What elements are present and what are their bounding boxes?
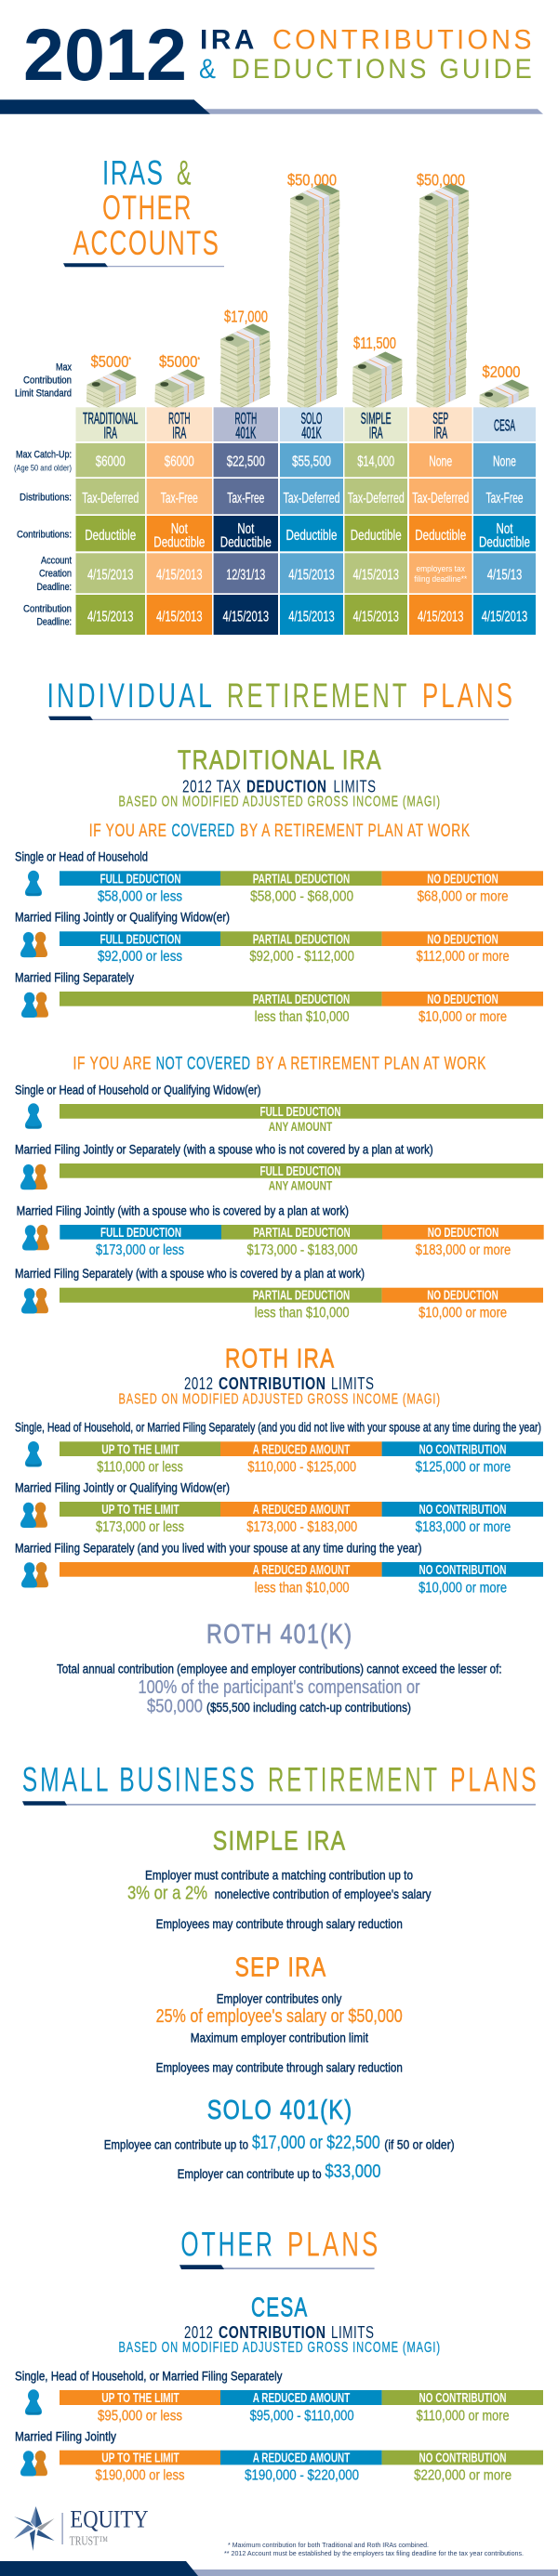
contribution bar: UP TO THE LIMIT: [101, 2451, 179, 2466]
contribution bar: [60, 2451, 543, 2466]
row: separately, lived with spouse: Married Filing Separately (and you lived with your spouse at any time during the year): [15, 1541, 422, 1556]
amounts: [255, 1306, 507, 1321]
amount: ANY AMOUNT: [269, 1178, 333, 1193]
amounts: $92,000 or less: [98, 949, 182, 965]
column: roth IRA: 4/15/2013: [156, 609, 203, 624]
amounts: $220,000 or more: [414, 2468, 512, 2484]
section title: TRADITIONAL IRA: [178, 746, 382, 776]
deduction bar: PARTIAL DEDUCTION: [253, 932, 350, 947]
stack: solo 401k: $50,000: [287, 170, 337, 189]
row: single or separately: [15, 2369, 543, 2424]
column: roth 401k: 401K: [235, 424, 256, 442]
column: SEP IRA: None: [429, 454, 452, 470]
amounts: less than $10,000: [255, 1306, 350, 1321]
row: spouse not covered: Married Filing Jointly or Separately (with a spouse who is not covered by a plan at work): [15, 1141, 433, 1156]
subtitle: LIMITS: [333, 777, 376, 796]
row: jointly or widow: Married Filing Jointly or Qualifying Widow(er): [15, 1480, 230, 1495]
amounts: $183,000 or more: [416, 1519, 511, 1535]
contribution bar: NO CONTRIBUTION: [418, 1503, 506, 1518]
column: traditional IRA: [76, 407, 145, 635]
column: roth 401k: $22,500: [227, 454, 265, 470]
stack: roth IRA: $5000: [159, 352, 205, 371]
column: simple IRA: 4/15/2013: [352, 568, 399, 584]
amounts: [255, 1580, 507, 1596]
amounts: [98, 888, 509, 904]
contribution bar: [60, 1502, 543, 1518]
employee limit: (if 50 or older): [384, 2136, 455, 2151]
subtitle: LIMITS: [331, 1373, 374, 1393]
contribution bar: A REDUCED AMOUNT: [253, 1563, 350, 1578]
stack: roth 401k: [220, 308, 271, 409]
highlight: 50,000 limit: [147, 1697, 411, 1717]
description: Employer contributes only: [217, 1991, 341, 2006]
column: roth 401k: Deductible: [220, 534, 272, 550]
column: CESA: 4/15/13: [487, 568, 522, 584]
column: solo 401k: 401K: [301, 424, 322, 442]
contribution bar: UP TO THE LIMIT: [101, 1442, 179, 1457]
column: solo 401k: 4/15/2013: [288, 568, 335, 584]
amounts: [95, 2468, 512, 2484]
deduction bar: PARTIAL DEDUCTION: [253, 1289, 350, 1304]
column: roth 401k: 4/15/2013: [223, 609, 269, 624]
deduction bar: [60, 871, 543, 887]
footnotes: ** 2012 Account must be established by the employers tax filing deadline for the tax year contributions.: [224, 2549, 524, 2557]
section title: SOLO 401(K): [207, 2096, 353, 2125]
amounts: [98, 2408, 510, 2424]
column: simple IRA: SIMPLE: [361, 409, 392, 427]
amounts: $112,000 or more: [417, 949, 510, 965]
contribution bar: [60, 2390, 543, 2406]
row labels: (Age 50 and older): [14, 464, 72, 473]
description: Employees may contribute through salary reduction: [156, 2059, 403, 2074]
employee limit: $17,000 or $22,500: [252, 2133, 380, 2153]
row: separately, spouse covered: [15, 1266, 543, 1321]
column: simple IRA: Deductible: [351, 528, 402, 544]
subtitle: CONTRIBUTION: [219, 2322, 326, 2342]
column: solo 401k: 4/15/2013: [288, 609, 335, 624]
row labels: Max Catch-Up:: [16, 450, 72, 461]
column: traditional IRA: 4/15/2013: [87, 609, 134, 624]
row labels: Deadline:: [37, 617, 72, 628]
deduction bar: PARTIAL DEDUCTION: [253, 872, 350, 887]
highlight: matching percent: [127, 1883, 432, 1903]
amounts: $190,000 or less: [95, 2468, 184, 2484]
amounts: $10,000 or more: [418, 1580, 507, 1596]
column: traditional IRA: Deductible: [85, 528, 136, 544]
column: CESA: 4/15/2013: [482, 609, 527, 624]
deduction bar: [60, 1104, 543, 1120]
row labels: Deadline:: [37, 582, 72, 593]
icon: couple: [20, 2451, 47, 2476]
amounts: $110,000 - $125,000: [247, 1459, 356, 1475]
employer limit: [178, 2162, 381, 2182]
subtitle: LIMITS: [331, 2322, 374, 2342]
deduction bar: NO DEDUCTION: [427, 932, 498, 947]
icon: couple: [20, 932, 47, 957]
subtitle: [182, 777, 376, 796]
column: SEP IRA: Tax-Deferred: [412, 491, 469, 506]
column: roth IRA: Not: [171, 521, 188, 537]
column: SEP IRA: filing deadline**: [414, 574, 467, 585]
row labels: Contribution: [23, 375, 72, 386]
heading: small business retirement plans: SMALL BUSINESS: [22, 1760, 258, 1798]
amounts: $95,000 - $110,000: [250, 2408, 354, 2424]
column: solo 401k: Tax-Deferred: [283, 491, 340, 506]
wordmark: equity: EQUITY: [70, 2505, 149, 2532]
section title: SIMPLE IRA: [213, 1827, 346, 1857]
subtitle: 2012: [184, 2322, 214, 2342]
employee limit: [104, 2133, 455, 2153]
highlight: compensation: 100% of the participant's compensation or: [138, 1677, 420, 1698]
contribution bar: NO CONTRIBUTION: [418, 2451, 506, 2466]
column: roth IRA: IRA: [172, 424, 186, 442]
deduction bar: FULL DEDUCTION: [260, 1105, 340, 1120]
column: roth 401k: [214, 407, 278, 635]
footnotes: [224, 2541, 524, 2557]
row: spouse not covered: [15, 1141, 543, 1193]
row: single or head of household: [15, 849, 543, 904]
column: roth 401k: Not: [237, 521, 255, 537]
column: roth 401k: Tax-Free: [227, 491, 264, 506]
amounts: [255, 1009, 507, 1025]
row labels: Contribution: [23, 603, 72, 614]
icon: couple: [21, 992, 48, 1018]
icon: person: [25, 1103, 42, 1129]
column: CESA: None: [493, 454, 516, 470]
title: deductions guide: DEDUCTIONS GUIDE: [232, 54, 535, 85]
row: single or qualifying widow: [15, 1082, 543, 1134]
section: traditional IRA: [15, 746, 544, 1321]
deduction bar: PARTIAL DEDUCTION: [253, 1226, 351, 1241]
column: traditional IRA: $6000: [96, 454, 126, 470]
column: simple IRA: Tax-Deferred: [348, 491, 405, 506]
section: roth IRA: [15, 1344, 543, 1596]
column: CESA: Not: [497, 521, 513, 537]
column: roth IRA: ROTH: [168, 409, 190, 427]
footer rule: [0, 2561, 558, 2576]
subheading: not covered: IF YOU ARE: [73, 1055, 152, 1074]
row labels: [14, 361, 72, 628]
row labels: Max: [56, 361, 72, 373]
deduction bar: NO DEDUCTION: [427, 992, 498, 1007]
column: SEP IRA: Deductible: [415, 528, 466, 544]
amounts: $95,000 or less: [98, 2408, 182, 2424]
stack: CESA: $2000: [482, 362, 521, 381]
row: separately, lived with spouse: [15, 1541, 543, 1596]
contribution bar: A REDUCED AMOUNT: [253, 2391, 350, 2406]
employee limit: Employee can contribute up to: [104, 2136, 248, 2151]
row: jointly or widow: [15, 1480, 543, 1535]
subheading: covered: BY A RETIREMENT PLAN AT WORK: [240, 821, 471, 841]
subtitle: 2012: [184, 1373, 214, 1393]
icon: person: [25, 2389, 42, 2415]
highlight: matching percent: 3% or a 2%: [127, 1883, 207, 1903]
header rule: [0, 99, 543, 114]
heading: individual retirement plans: RETIREMENT: [227, 677, 409, 715]
row: single or head of household: Single or Head of Household: [15, 849, 148, 864]
amounts: $58,000 or less: [98, 888, 182, 904]
deduction bar: NO DEDUCTION: [427, 872, 498, 887]
highlight: matching percent: nonelective contribution of employee's salary: [215, 1886, 432, 1901]
amounts: $92,000 - $112,000: [249, 949, 354, 965]
contribution bar: A REDUCED AMOUNT: [253, 1442, 350, 1457]
deduction bar: FULL DEDUCTION: [260, 1164, 340, 1179]
stack: SEP IRA: [417, 170, 469, 410]
amounts: [98, 949, 510, 965]
row: married filing separately: Married Filing Separately: [15, 970, 134, 985]
stack: solo 401k: [287, 170, 339, 410]
column: solo 401k: [280, 407, 343, 635]
deduction bar: [60, 931, 543, 947]
logo: Equity Trust: [14, 2505, 149, 2551]
description: Maximum employer contribution limit: [191, 2030, 368, 2044]
column: SEP IRA: [409, 407, 472, 635]
stack: roth IRA: [154, 352, 205, 409]
row: married filing jointly: Married Filing Jointly: [15, 2428, 116, 2443]
section title: ROTH 401(K): [206, 1620, 353, 1649]
table: account comparison: [14, 361, 536, 635]
subtitle: 2012 TAX: [182, 777, 242, 796]
deduction bar: NO DEDUCTION: [428, 1226, 498, 1241]
title: ampersand: &: [199, 54, 216, 85]
icon: person: [25, 1441, 42, 1466]
contribution bar: [60, 1441, 543, 1457]
row: separately, spouse covered: Married Filing Separately (with a spouse who is covered by a plan at work): [15, 1266, 365, 1281]
subtitle: CONTRIBUTION: [219, 1373, 326, 1393]
amounts: [97, 1459, 511, 1475]
employer limit: $33,000: [325, 2162, 381, 2182]
footnotes: * Maximum contribution for both Traditional and Roth IRAs combined.: [228, 2541, 429, 2549]
heading: IRAs and other accounts: &: [177, 152, 192, 191]
row: single or separately: Single, Head of Household, or Married Filing Separately: [15, 2369, 283, 2384]
highlight: 25 percent: 25% of employee's salary or $50,000: [156, 2006, 403, 2027]
heading: individual retirement plans: [46, 677, 515, 720]
column: roth IRA: Deductible: [153, 534, 205, 550]
row: married filing jointly: [15, 2428, 543, 2484]
column: roth IRA: 4/15/2013: [156, 568, 203, 584]
section: solo 401k: [104, 2096, 455, 2182]
amounts: $68,000 or more: [418, 888, 509, 904]
column: simple IRA: [344, 407, 407, 635]
column: roth 401k: 12/31/13: [226, 568, 265, 584]
stack: roth 401k: $17,000: [224, 308, 268, 326]
deduction bar: NO DEDUCTION: [427, 1289, 498, 1304]
heading: other plans: [179, 2226, 380, 2269]
row: married filing jointly: [15, 910, 543, 965]
deduction bar: FULL DEDUCTION: [100, 1226, 181, 1241]
amounts: $173,000 - $183,000: [247, 1242, 358, 1258]
contribution bar: A REDUCED AMOUNT: [253, 2451, 350, 2466]
row: married filing separately: [15, 970, 543, 1025]
column: SEP IRA: employers tax: [416, 564, 465, 574]
description: Employer must contribute a matching contribution up to: [145, 1868, 413, 1883]
column: simple IRA: $14,000: [357, 454, 394, 470]
contribution bar: [60, 1562, 543, 1578]
column: roth 401k: ROTH: [234, 409, 257, 427]
row labels: Contributions:: [17, 530, 72, 541]
amounts: less than $10,000: [255, 1009, 350, 1025]
subheading: covered: COVERED: [171, 821, 235, 841]
deduction bar: [60, 1225, 544, 1241]
column: roth IRA: $6000: [165, 454, 194, 470]
amounts: [96, 1242, 511, 1258]
contribution bar: NO CONTRIBUTION: [418, 2391, 506, 2406]
contribution bar: UP TO THE LIMIT: [101, 2391, 179, 2406]
amounts: $110,000 or less: [97, 1459, 183, 1475]
subheading: covered: IF YOU ARE: [89, 821, 167, 841]
row: married filing jointly: Married Filing Jointly or Qualifying Widow(er): [15, 910, 230, 925]
icon: star: [14, 2506, 54, 2551]
stack: traditional IRA: $5000: [91, 352, 136, 371]
amounts: $110,000 or more: [417, 2408, 510, 2424]
column: solo 401k: $55,500: [292, 454, 331, 470]
contribution bar: NO CONTRIBUTION: [418, 1442, 506, 1457]
column: CESA: [473, 407, 536, 635]
heading: small business retirement plans: RETIREMENT: [268, 1760, 440, 1798]
heading: other plans: PLANS: [287, 2226, 380, 2264]
amounts: $125,000 or more: [416, 1459, 511, 1475]
chart: money stacks: [86, 170, 529, 412]
stack: roth IRA: *: [197, 356, 200, 364]
contribution bar: A REDUCED AMOUNT: [253, 1503, 350, 1518]
row labels: Distributions:: [20, 493, 72, 504]
header: [0, 13, 543, 114]
heading: IRAs and other accounts: [63, 152, 224, 267]
section title: ROTH IRA: [225, 1344, 335, 1373]
deduction bar: [60, 1288, 543, 1304]
icon: couple: [21, 1562, 48, 1587]
amounts: $183,000 or more: [416, 1242, 511, 1258]
MAGI note: BASED ON MODIFIED ADJUSTED GROSS INCOME (MAGI): [119, 794, 441, 809]
stack: simple IRA: $11,500: [353, 334, 396, 352]
amounts: less than $10,000: [255, 1580, 350, 1596]
amounts: $173,000 or less: [96, 1519, 184, 1535]
amounts: $190,000 - $220,000: [245, 2468, 359, 2484]
stack: simple IRA: [352, 334, 403, 409]
row: jointly, spouse covered: [17, 1203, 544, 1258]
amounts: $173,000 - $183,000: [246, 1519, 357, 1535]
row labels: Account: [41, 556, 72, 567]
amount: ANY AMOUNT: [269, 1119, 333, 1134]
subtitle: DEDUCTION: [246, 777, 327, 796]
heading: IRAs and other accounts: IRAS: [102, 152, 164, 191]
column: solo 401k: Deductible: [286, 528, 338, 544]
stack: traditional IRA: *: [128, 356, 131, 364]
column: CESA: Deductible: [479, 534, 530, 550]
deduction bar: [60, 992, 543, 1007]
column: CESA: Tax-Free: [485, 491, 524, 506]
amounts: $58,000 - $68,000: [250, 888, 353, 904]
column: traditional IRA: 4/15/2013: [87, 568, 134, 584]
stack: SEP IRA: $50,000: [417, 170, 465, 189]
column: roth IRA: Tax-Free: [161, 491, 198, 506]
icon: couple: [21, 1288, 48, 1314]
highlight: 50,000 limit: $50,000: [147, 1697, 203, 1717]
section: CESA: [15, 2293, 543, 2484]
section title: CESA: [251, 2293, 309, 2323]
title: IRA: IRA: [200, 24, 258, 55]
stack: traditional IRA: [86, 352, 136, 409]
deduction bar: [60, 1163, 543, 1179]
stack: CESA: [480, 362, 529, 411]
amounts: [96, 1519, 511, 1535]
MAGI note: BASED ON MODIFIED ADJUSTED GROSS INCOME (MAGI): [119, 1392, 441, 1408]
employer limit: Employer can contribute up to: [178, 2166, 322, 2181]
heading: small business retirement plans: [22, 1760, 539, 1806]
row: single or qualifying widow: Single or Head of Household or Qualifying Widow(er): [15, 1082, 260, 1097]
icon: couple: [20, 1164, 47, 1189]
column: SEP IRA: IRA: [433, 424, 447, 442]
contribution bar: UP TO THE LIMIT: [101, 1503, 179, 1518]
deduction bar: PARTIAL DEDUCTION: [253, 992, 350, 1007]
column: traditional IRA: TRADITIONAL: [83, 409, 139, 427]
deduction bar: FULL DEDUCTION: [100, 932, 180, 947]
divider: [61, 2513, 63, 2544]
row labels: Creation: [39, 569, 72, 580]
highlight: 50,000 limit: ($55,500 including catch-up contributions): [206, 1700, 411, 1715]
subheading: not covered: [73, 1055, 486, 1074]
row labels: Limit Standard: [15, 388, 72, 399]
section: roth 401k: [57, 1620, 502, 1717]
column: traditional IRA: Tax-Deferred: [82, 491, 139, 506]
column: simple IRA: 4/15/2013: [352, 609, 399, 624]
column: solo 401k: SOLO: [301, 409, 322, 427]
subheading: not covered: NOT COVERED: [156, 1055, 251, 1074]
column: simple IRA: IRA: [369, 424, 383, 442]
column: CESA: CESA: [494, 415, 515, 434]
title: 2012: 2012: [23, 13, 187, 96]
heading: individual retirement plans: INDIVIDUAL: [46, 677, 215, 715]
row: single, did not live with spouse: [15, 1420, 543, 1475]
heading: IRAs and other accounts: ACCOUNTS: [73, 223, 219, 262]
row: jointly, spouse covered: Married Filing Jointly (with a spouse who is covered by a plan at work): [17, 1203, 349, 1217]
heading: IRAs and other accounts: OTHER: [102, 188, 193, 227]
MAGI note: BASED ON MODIFIED ADJUSTED GROSS INCOME (MAGI): [119, 2340, 441, 2356]
subheading: covered: [89, 821, 471, 841]
icon: person: [25, 871, 42, 896]
amounts: $10,000 or more: [418, 1306, 507, 1321]
column: traditional IRA: IRA: [103, 424, 117, 442]
amounts: $10,000 or more: [418, 1009, 507, 1025]
deduction bar: FULL DEDUCTION: [100, 872, 180, 887]
section: SEP IRA: [156, 1953, 403, 2074]
heading: individual retirement plans: PLANS: [422, 677, 515, 715]
column: SEP IRA: SEP: [432, 409, 448, 427]
amounts: $173,000 or less: [96, 1242, 184, 1258]
icon: couple: [22, 1225, 49, 1251]
heading: other plans: OTHER: [180, 2226, 275, 2264]
icon: couple: [20, 1502, 47, 1528]
wordmark: trust: TRUST™: [70, 2534, 108, 2548]
title: contributions: CONTRIBUTIONS: [272, 24, 535, 55]
column: roth IRA: [147, 407, 212, 635]
section title: SEP IRA: [235, 1953, 327, 1983]
contribution bar: NO CONTRIBUTION: [418, 1563, 506, 1578]
section: simple IRA: [127, 1827, 432, 1931]
description: Employees may contribute through salary reduction: [156, 1916, 403, 1931]
column: SEP IRA: 4/15/2013: [418, 609, 464, 624]
